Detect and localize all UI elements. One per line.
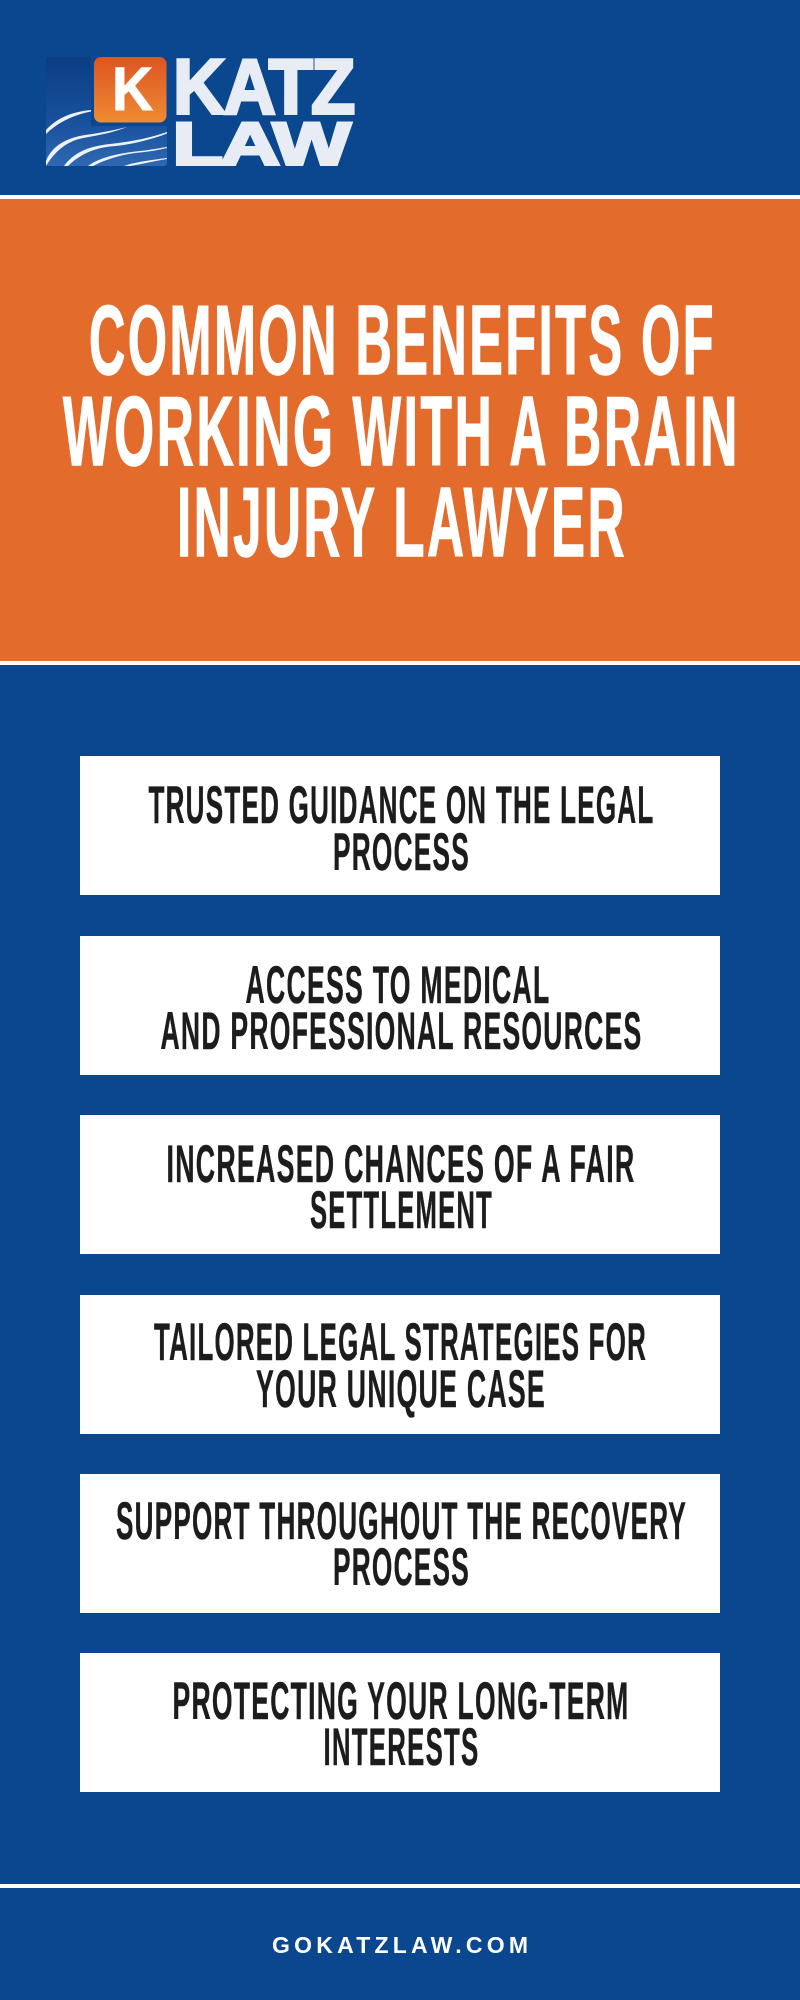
logo wordmark: KATZ (173, 42, 354, 130)
logo wordmark (172, 42, 354, 178)
benefit card 2 (80, 936, 720, 1075)
benefit card 4 (80, 1295, 720, 1434)
benefit card 6 (80, 1653, 720, 1792)
benefit card 5 (80, 1474, 720, 1613)
logo mark: orange K tile: K (112, 55, 153, 123)
logo wordmark: LAW (172, 110, 351, 178)
benefit card 5: PROCESS (333, 1538, 470, 1597)
panel: orange title band (0, 199, 800, 661)
divider: lower white rule (0, 661, 800, 665)
logo mark: orange K tile (94, 55, 166, 123)
benefit card 6: INTERESTS (324, 1718, 480, 1777)
title (63, 285, 740, 577)
benefit card 1 (80, 756, 720, 895)
benefit card 3 (80, 1115, 720, 1254)
logo: Katz Law (46, 57, 355, 166)
divider: footer white rule (0, 1884, 800, 1888)
benefit card 3: SETTLEMENT (310, 1181, 493, 1240)
benefit card 1: PROCESS (333, 823, 470, 882)
logo mark: wave panel (46, 57, 167, 166)
divider: top white rule (0, 195, 800, 199)
footer website: GOKATZLAW.COM (272, 1932, 528, 1958)
